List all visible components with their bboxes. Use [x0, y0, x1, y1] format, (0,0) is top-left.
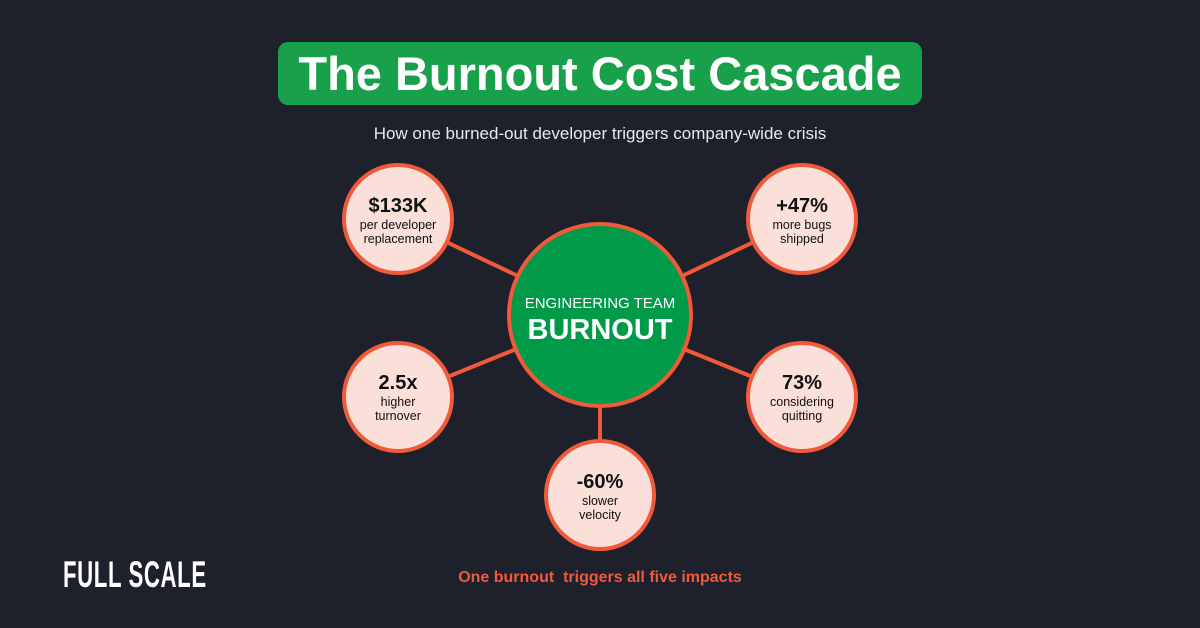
footer note: One burnout triggers all five impacts — [458, 569, 742, 586]
stat: -60% — [546, 441, 654, 549]
stat: 2.5x — [344, 343, 452, 451]
stat: -60%: velocity — [579, 508, 622, 522]
title: The Burnout Cost Cascade — [298, 47, 902, 100]
stat: $133K: $133K — [369, 195, 428, 217]
stat: +47% — [748, 165, 856, 273]
stat: 73%: 73% — [782, 372, 822, 394]
stat: 2.5x: turnover — [375, 409, 421, 423]
stat: +47%: more bugs — [772, 218, 832, 232]
stat: -60%: slower — [582, 494, 618, 508]
stat: $133K: per developer — [360, 218, 436, 232]
stat: 73%: considering — [770, 395, 834, 409]
stat: 2.5x: higher — [381, 395, 415, 409]
stat: 73%: quitting — [782, 409, 822, 423]
center circle: burnout — [509, 224, 691, 406]
stat: $133K: replacement — [364, 232, 433, 246]
stat: +47%: shipped — [780, 232, 824, 246]
connectors — [398, 219, 802, 495]
stat: 2.5x: 2.5x — [379, 372, 417, 394]
stat: $133K — [344, 165, 452, 273]
stat: 73% — [748, 343, 856, 451]
stat: -60%: -60% — [577, 471, 624, 493]
stat: +47%: +47% — [776, 195, 828, 217]
logo: FULL SCALE — [63, 554, 207, 595]
subtitle: How one burned-out developer triggers company-wide crisis — [374, 124, 826, 143]
center circle: burnout: BURNOUT — [528, 314, 673, 346]
center circle: burnout: ENGINEERING TEAM — [525, 295, 675, 312]
